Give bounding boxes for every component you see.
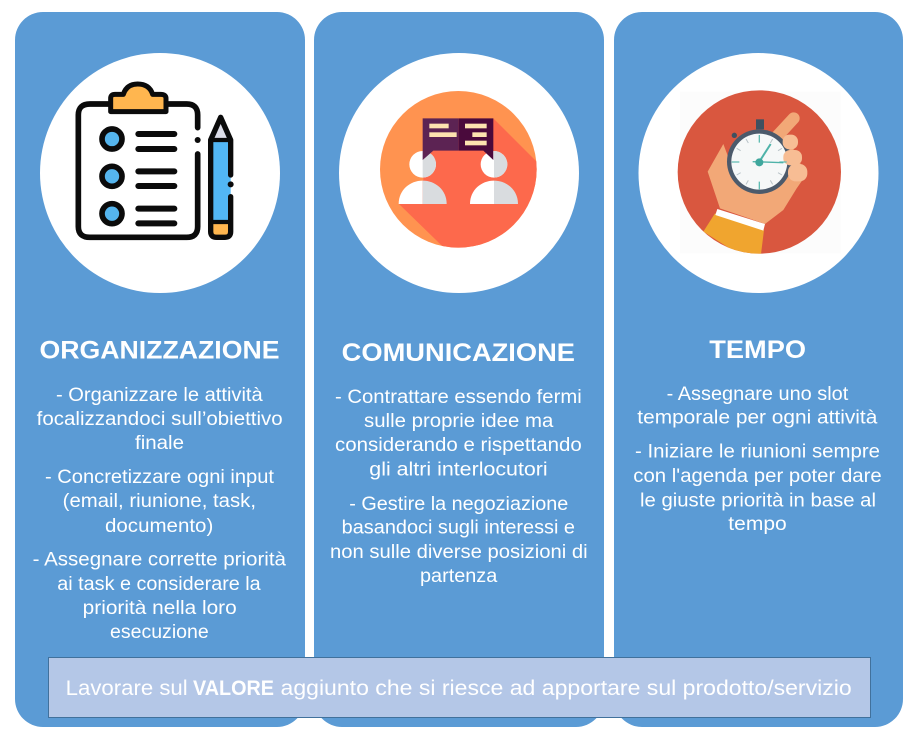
text block: tempo bullets [633, 384, 882, 535]
panel: tempo [614, 12, 903, 727]
callout: valore aggiunto [48, 658, 870, 718]
icon: clipboard and pencil [78, 84, 234, 237]
text block: comunicazione bullets: - Contrattare essendo fermi [335, 387, 582, 408]
callout box [48, 658, 870, 718]
panel background [314, 12, 604, 727]
text block: organizzazione bullets [33, 385, 286, 643]
callout text: Lavorare sul [66, 677, 188, 700]
icon: hand holding stopwatch [678, 90, 841, 257]
text block: tempo bullets: tempo [728, 514, 787, 535]
text block: comunicazione bullets: basandoci sugli interessi e [342, 518, 575, 538]
text block: tempo bullets: temporale per ogni attività [637, 408, 878, 429]
callout text: aggiunto che si riesce ad apportare sul prodotto/servizio [280, 677, 852, 700]
text block: organizzazione bullets: documento) [105, 516, 213, 537]
callout text [66, 677, 852, 700]
icon: two people talking [380, 91, 537, 248]
panel: comunicazione [314, 12, 604, 727]
text block: comunicazione bullets: sulle proprie idee ma [364, 411, 554, 432]
text block: tempo bullets: le giuste priorità in base al [640, 491, 876, 512]
text block: comunicazione bullets: partenza [420, 566, 498, 587]
text block: organizzazione bullets: priorità nella loro [83, 598, 237, 619]
heading: comunicazione: COMUNICAZIONE [342, 339, 575, 367]
text block: comunicazione bullets: - Gestire la negoziazione [349, 494, 568, 515]
text block: organizzazione bullets: esecuzione [110, 622, 209, 643]
text block: organizzazione bullets: - Organizzare le attività [56, 385, 263, 406]
text block: tempo bullets: con l'agenda per poter dare [633, 466, 882, 487]
heading: tempo: TEMPO [709, 336, 806, 364]
text block: comunicazione bullets [330, 387, 588, 587]
panel: organizzazione [15, 12, 305, 727]
text block: organizzazione bullets: finale [135, 433, 184, 454]
callout text: VALORE [193, 677, 274, 700]
text block: organizzazione bullets: ai task e considerare la [57, 574, 261, 595]
text block: organizzazione bullets: (email, riunione, task, [63, 491, 256, 512]
text block: organizzazione bullets: - Concretizzare ogni input [45, 467, 275, 488]
text block: tempo bullets: - Iniziare le riunioni sempre [635, 442, 880, 463]
heading: organizzazione: ORGANIZZAZIONE [40, 336, 280, 364]
panel background [15, 12, 305, 727]
panel background [614, 12, 903, 727]
text block: organizzazione bullets: - Assegnare corrette priorità [33, 550, 286, 571]
icon circle [40, 53, 280, 293]
text block: comunicazione bullets: considerando e rispettando [335, 435, 582, 456]
text block: tempo bullets: - Assegnare uno slot [667, 384, 849, 405]
icon circle [339, 53, 579, 293]
text block: comunicazione bullets: gli altri interlocutori [369, 460, 548, 481]
text block: comunicazione bullets: non sulle diverse posizioni di [330, 542, 588, 563]
text block: organizzazione bullets: focalizzandoci sull’obiettivo [37, 409, 283, 430]
icon circle [638, 53, 878, 293]
